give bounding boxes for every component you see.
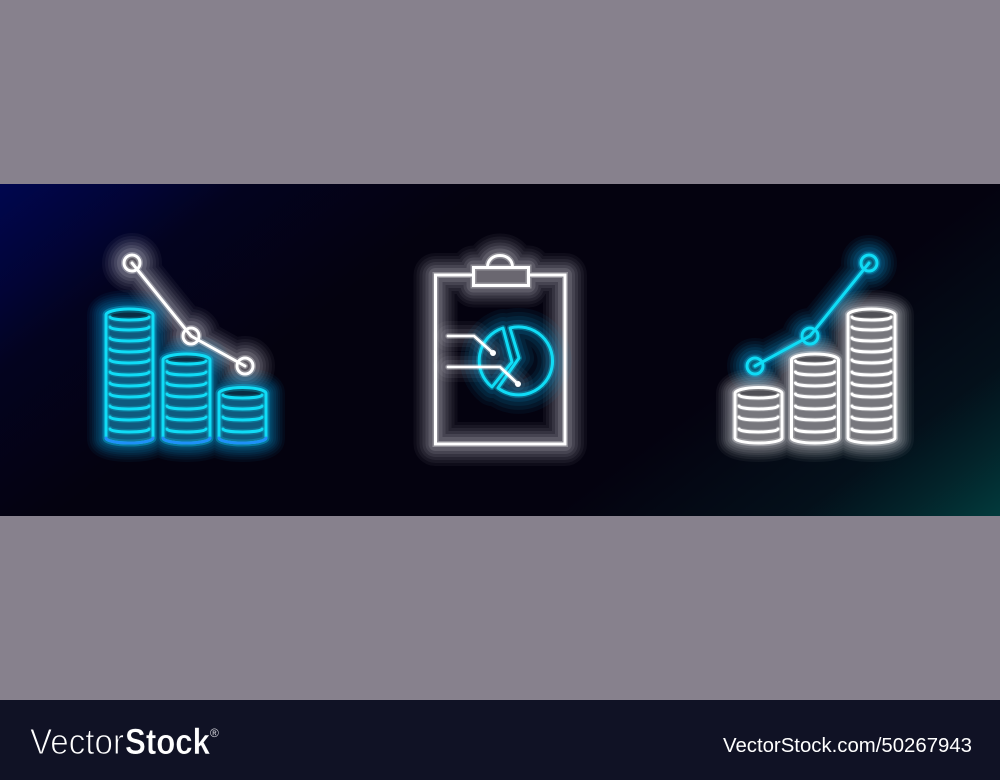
white coin stacks xyxy=(735,309,895,443)
VectorStock logo: Stock xyxy=(125,721,211,762)
white clipboard outline xyxy=(436,256,565,444)
footer bar xyxy=(0,700,1000,780)
white stack halo xyxy=(735,309,895,443)
rising blue trend line with nodes xyxy=(747,255,877,374)
icon: rising coin stacks with trend line xyxy=(735,255,895,443)
white trend line halo xyxy=(124,255,253,374)
blue stack interiors xyxy=(106,309,266,443)
top grey panel xyxy=(0,0,1000,184)
blue trend line halo xyxy=(747,255,877,374)
white leader lines with dots xyxy=(448,336,521,387)
pie chart halo xyxy=(479,327,553,395)
blue coin stacks xyxy=(106,309,266,443)
blue pie chart xyxy=(479,327,553,395)
clipboard halo xyxy=(436,256,565,444)
bottom grey panel xyxy=(0,516,1000,700)
VectorStock logo: Vector xyxy=(30,721,124,762)
falling white trend line with nodes xyxy=(124,255,253,374)
white stack interiors xyxy=(735,309,895,443)
dark neon band background xyxy=(0,184,1000,516)
image id text: VectorStock.com/50267943 xyxy=(723,735,972,757)
icon: clipboard with pie chart xyxy=(436,256,565,444)
VectorStock logo: ® xyxy=(210,726,219,740)
icon: falling coin stacks with trend line xyxy=(106,255,266,443)
VectorStock logo xyxy=(30,721,219,762)
blue stack halo xyxy=(106,309,266,443)
